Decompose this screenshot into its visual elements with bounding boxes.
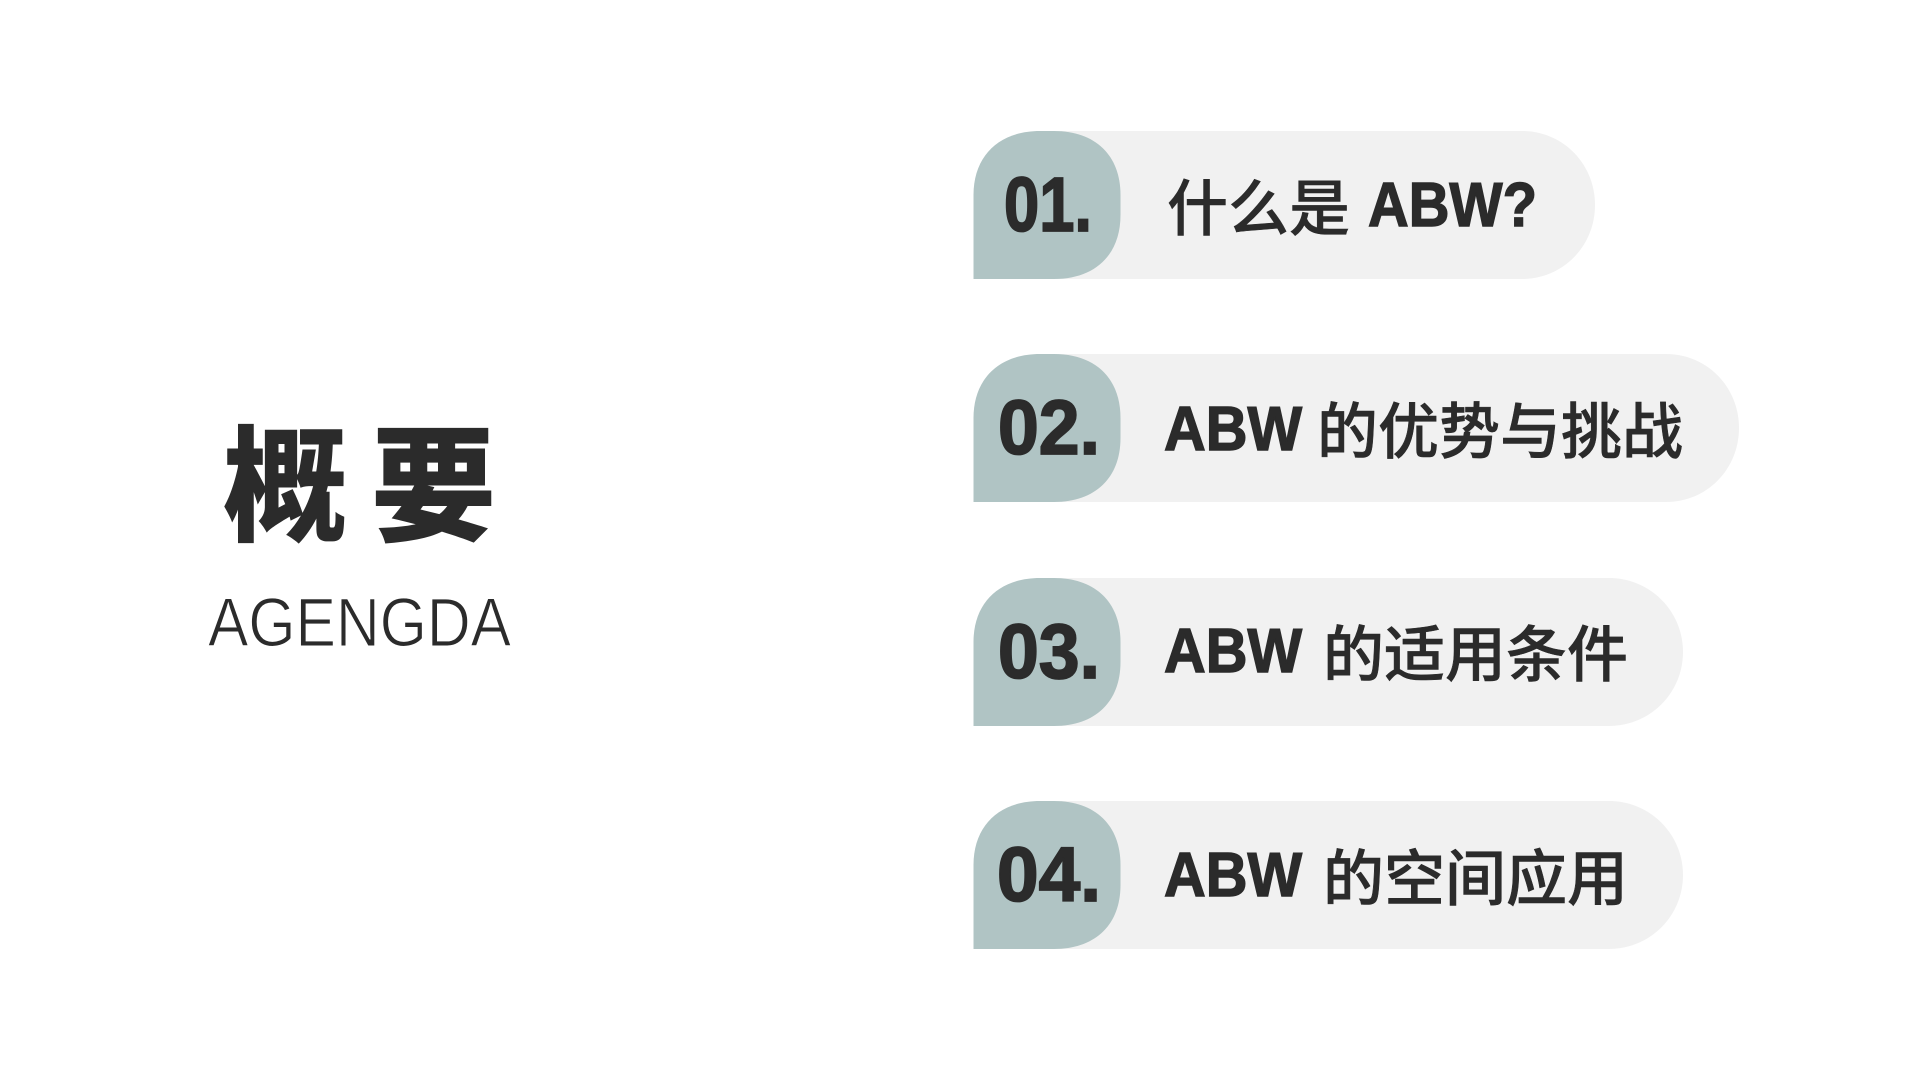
heading: 概要: 概要 [223,419,519,558]
label: 的空间应用 [1323,845,1628,913]
agenda item 03 [974,578,1683,726]
label: 的优势与挑战 [1317,398,1683,466]
subtitle: AGENGDA: AGENGDA [208,584,511,661]
number: 04. [997,832,1101,918]
number: 02. [998,385,1100,471]
label: ABW [1164,617,1302,686]
pill background [1040,131,1595,279]
label: 什么是 [1167,175,1350,243]
number: 03. [998,609,1100,695]
label: ABW [1164,395,1302,464]
label: ABW? [1368,171,1537,240]
label: ABW [1164,841,1302,910]
label: 的适用条件 [1323,621,1628,689]
label [1164,841,1628,913]
title block [208,419,519,661]
label [1167,171,1537,243]
pill background [1040,578,1683,726]
number tile [974,578,1120,726]
pill background [1040,354,1739,502]
number tile [974,131,1120,279]
label [1164,395,1683,466]
label [1164,617,1628,689]
pill background [1040,801,1683,949]
number tile [974,801,1120,949]
number: 01. [1004,162,1092,248]
agenda item 02 [974,354,1739,502]
agenda item 04 [974,801,1683,949]
number tile [974,354,1120,502]
agenda item 01 [974,131,1595,279]
